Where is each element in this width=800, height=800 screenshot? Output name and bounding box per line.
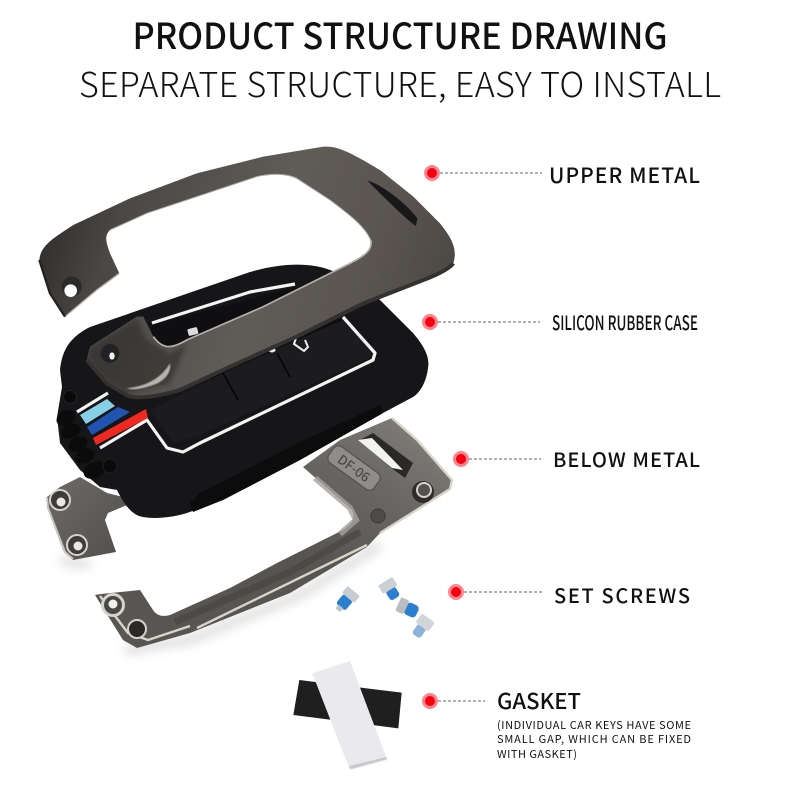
callout: upper metal: UPPER METAL (549, 160, 700, 190)
button panel (150, 320, 372, 443)
screw hole right (101, 344, 119, 363)
screw holes (412, 481, 434, 503)
main body of below metal (95, 418, 452, 648)
key ring ribs (54, 407, 109, 482)
gasket note: SMALL GAP, WHICH CAN BE FIXED (497, 731, 691, 747)
small bolts (64, 390, 76, 404)
callout: gasket: GASKET (497, 684, 581, 716)
bevel highlight (110, 174, 371, 240)
screw 2 (378, 577, 403, 603)
light machined edge (100, 418, 452, 640)
left arm of below metal (47, 477, 127, 560)
key icon (294, 338, 308, 351)
subtitle: SEPARATE STRUCTURE, EASY TO INSTALL (79, 58, 721, 107)
screw 4 (409, 613, 435, 641)
gasket (293, 661, 402, 769)
DF-06 engraving (325, 443, 383, 493)
DF-06 engraving: DF-06 (334, 449, 374, 486)
gasket note: WITH GASKET) (497, 746, 577, 762)
front arm shading (88, 318, 187, 393)
screw 1 (332, 586, 360, 615)
gasket note: (INDIVIDUAL CAR KEYS HAVE SOME (497, 717, 691, 733)
upper inner panel (150, 287, 345, 380)
button dividers (223, 353, 290, 400)
white piping line (100, 284, 375, 452)
set screws (332, 577, 435, 641)
side button (190, 405, 383, 512)
callout: gasket (422, 684, 691, 762)
callout: set screws: SET SCREWS (554, 580, 690, 609)
callout: silicon rubber case (422, 307, 698, 336)
upper metal frame (39, 147, 455, 397)
gasket note (497, 717, 691, 762)
silicon rubber case (54, 265, 428, 518)
inner strip texture (175, 532, 360, 622)
title: PRODUCT STRUCTURE DRAWING (132, 8, 668, 60)
slot (360, 433, 413, 478)
screw hole left (62, 277, 82, 297)
below metal frame (47, 418, 452, 650)
callout: below metal: BELOW METAL (553, 444, 700, 473)
slot (367, 181, 417, 226)
callout: silicon rubber case: SILICON RUBBER CASE (552, 307, 698, 336)
callout: upper metal (424, 160, 700, 190)
callout: set screws (448, 580, 690, 609)
M stripes (80, 399, 148, 445)
callout: below metal (453, 444, 700, 473)
screw 3 (395, 597, 420, 620)
